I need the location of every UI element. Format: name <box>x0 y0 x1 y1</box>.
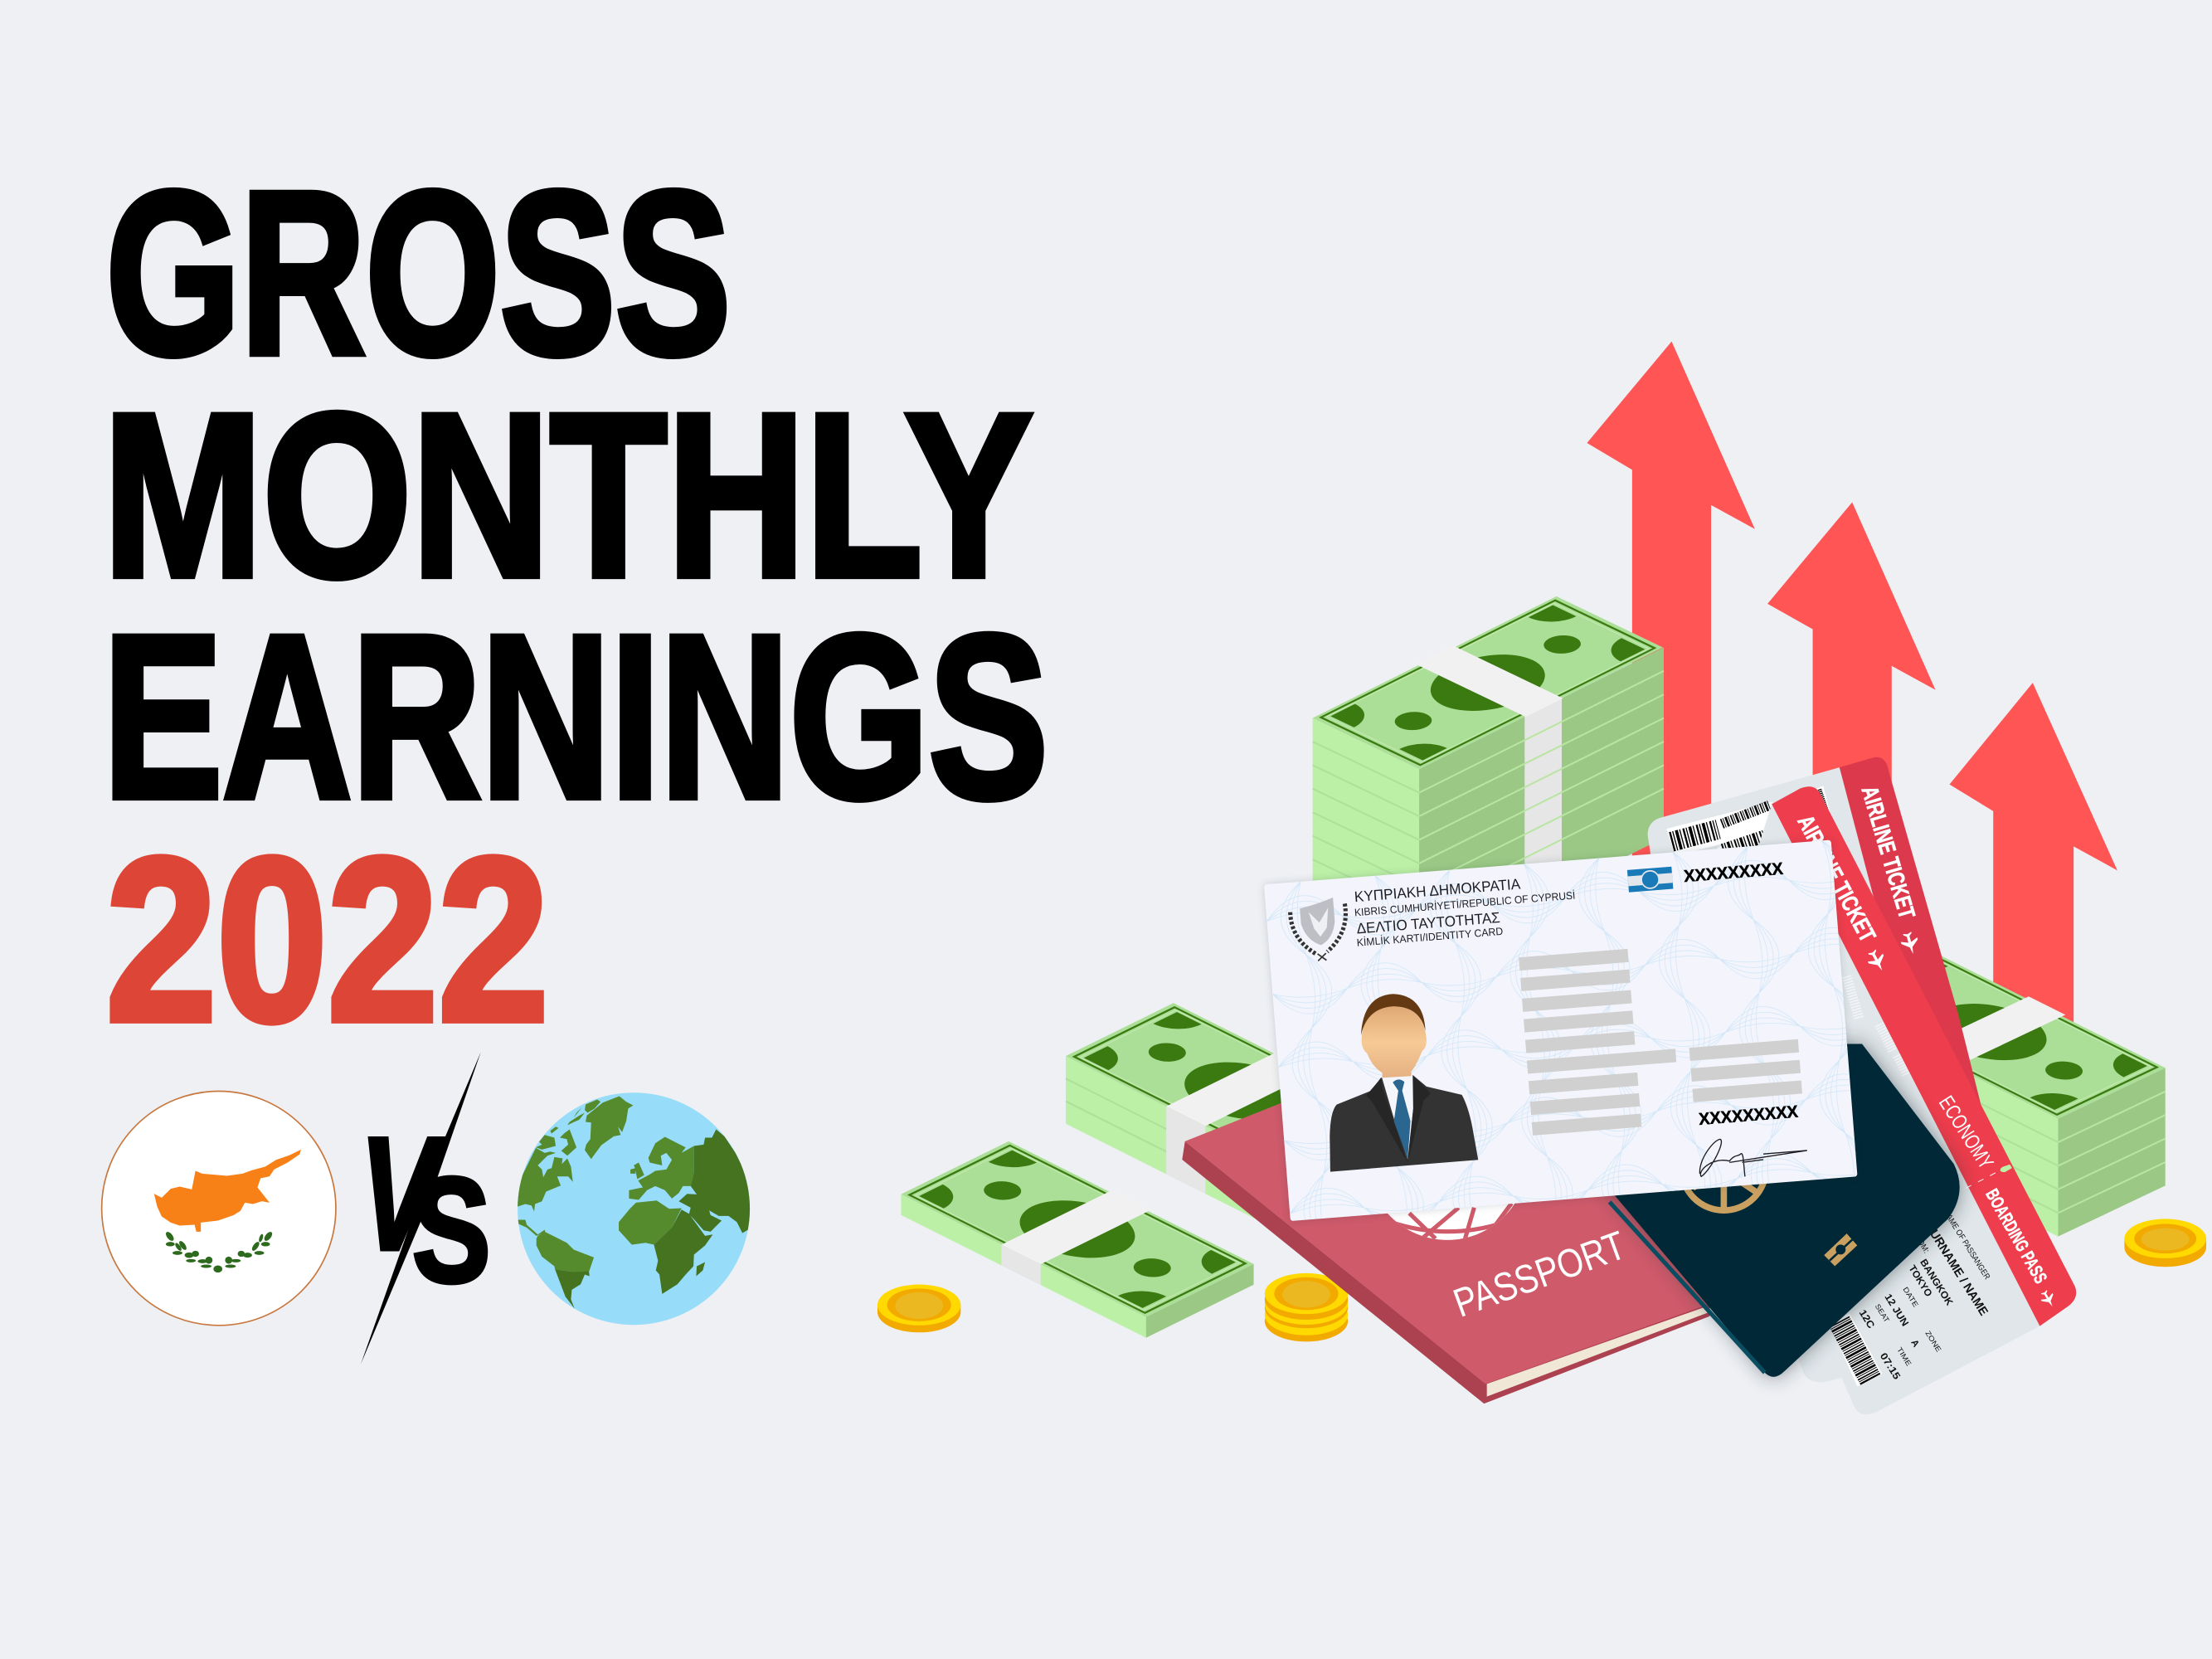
ticket barcodes <box>1666 786 1830 857</box>
cyprus island and wreath <box>154 1150 301 1272</box>
passport label: PASSPORT <box>1448 1223 1631 1326</box>
label: AIRLINE TICKET <box>1857 783 1920 922</box>
passenger details: SEAT <box>1874 1302 1891 1324</box>
ticket dotted decoration <box>1846 976 1907 1075</box>
ticket lower details <box>1830 1165 2059 1386</box>
title line: EARNINGS: EARNINGS <box>103 587 1048 847</box>
tie <box>1393 1079 1411 1159</box>
passenger details: A <box>1908 1338 1921 1349</box>
money stack: right <box>1813 945 2166 1237</box>
hair <box>1361 994 1426 1035</box>
signature <box>1699 1139 1807 1176</box>
letter V: V <box>346 1105 451 1284</box>
label: BOARDING PASS <box>1981 1185 2051 1287</box>
passenger details: NAME OF PASSANGER <box>1941 1209 1991 1282</box>
card flag <box>1627 867 1673 893</box>
card heading: KIBRIS CUMHURİYETİ/REPUBLIC OF CYPRUSİ <box>1354 889 1576 918</box>
cyprus emblem <box>1289 897 1349 963</box>
coin: left <box>878 1284 960 1332</box>
front ticket <box>1695 786 2076 1414</box>
passenger details: 12C <box>1857 1307 1877 1331</box>
ticket body <box>1648 767 1975 1129</box>
money stack: big <box>1313 596 1664 960</box>
label: ECONOMY <box>1934 1092 1998 1174</box>
title line: 2022: 2022 <box>106 810 549 1070</box>
ticket body <box>1695 804 2039 1414</box>
passenger details: BANGKOK <box>1918 1257 1956 1308</box>
stub notch <box>2001 1165 2012 1172</box>
title: gross monthly earnings 2022 <box>103 144 1048 1070</box>
passenger details: 12 JUN <box>1882 1292 1911 1328</box>
card heading: ΚΥΠΡΙΑΚΗ ΔΗΜΟΚΡΑΤΙΑ <box>1354 876 1521 905</box>
continents light <box>514 1097 694 1272</box>
continents dark <box>555 1130 752 1309</box>
passport emblem <box>1387 1203 1514 1240</box>
back ticket stub <box>1840 757 1983 1115</box>
arrows <box>1587 342 2117 1044</box>
dark passport shadow <box>1594 1044 1960 1377</box>
arrow 2 <box>1767 502 1936 846</box>
passenger details: DATE <box>1901 1286 1920 1309</box>
title line: MONTHLY: MONTHLY <box>103 366 1033 625</box>
pages <box>1487 1306 1709 1397</box>
ticket stub <box>1772 786 2076 1326</box>
title line: GROSS: GROSS <box>106 144 731 403</box>
id card shadow <box>1264 840 1856 1221</box>
icon: plane <box>1864 947 1889 975</box>
shirt <box>1382 1074 1413 1159</box>
passenger details <box>1857 1209 1991 1382</box>
gold emblem <box>1681 1126 1766 1210</box>
card heading: ΔΕΛΤΙΟ ΤΑΥΤΟΤΗΤΑΣ <box>1356 909 1500 937</box>
slash <box>361 1052 481 1365</box>
spine and cover edge <box>1182 1141 1709 1404</box>
money stack: middle left <box>1066 1003 1418 1247</box>
coin stack <box>1265 1273 1348 1341</box>
icon: world globe <box>514 1092 752 1325</box>
passenger details: ZONE <box>1923 1329 1943 1354</box>
passenger details: FROM: <box>1909 1229 1931 1255</box>
card heading <box>1353 871 1578 949</box>
red passport <box>1182 1103 1710 1404</box>
arrow 1 <box>1587 342 1755 888</box>
barcode <box>1830 1313 1882 1386</box>
coin: right <box>2124 1219 2206 1267</box>
lapels <box>1366 1075 1431 1162</box>
card heading: KİMLİK KARTI/IDENTITY CARD <box>1356 925 1504 949</box>
passenger details: TIME <box>1895 1345 1913 1368</box>
passenger details: TOKYO <box>1906 1263 1935 1299</box>
ticket lower edge <box>1780 1298 1850 1382</box>
passenger details: SURNAME / NAME <box>1923 1221 1991 1318</box>
passenger details: 07:15 <box>1878 1350 1903 1382</box>
id card <box>1264 840 1858 1221</box>
vs badge <box>346 1052 491 1365</box>
perforation <box>1966 1173 1996 1188</box>
money stack: bottom left <box>901 1141 1254 1338</box>
suit <box>1330 1075 1478 1172</box>
back ticket <box>1648 757 1983 1382</box>
portrait <box>1330 994 1478 1172</box>
face <box>1362 1006 1427 1078</box>
icon: plane <box>1899 931 1921 956</box>
label: AIRLINE TICKET <box>1792 810 1881 946</box>
letter S: S <box>412 1147 491 1314</box>
second card number: XXXXXXXXX <box>1698 1103 1799 1129</box>
gold chip <box>1824 1233 1857 1266</box>
cover <box>1185 917 1834 1384</box>
dark passport <box>1594 1044 1960 1377</box>
card number: XXXXXXXXX <box>1683 860 1784 886</box>
arrow 3 <box>1950 683 2117 1044</box>
icon: cyprus flag circle <box>102 1091 336 1326</box>
icon: plane <box>2038 1288 2059 1310</box>
data bars <box>1519 937 1804 1136</box>
